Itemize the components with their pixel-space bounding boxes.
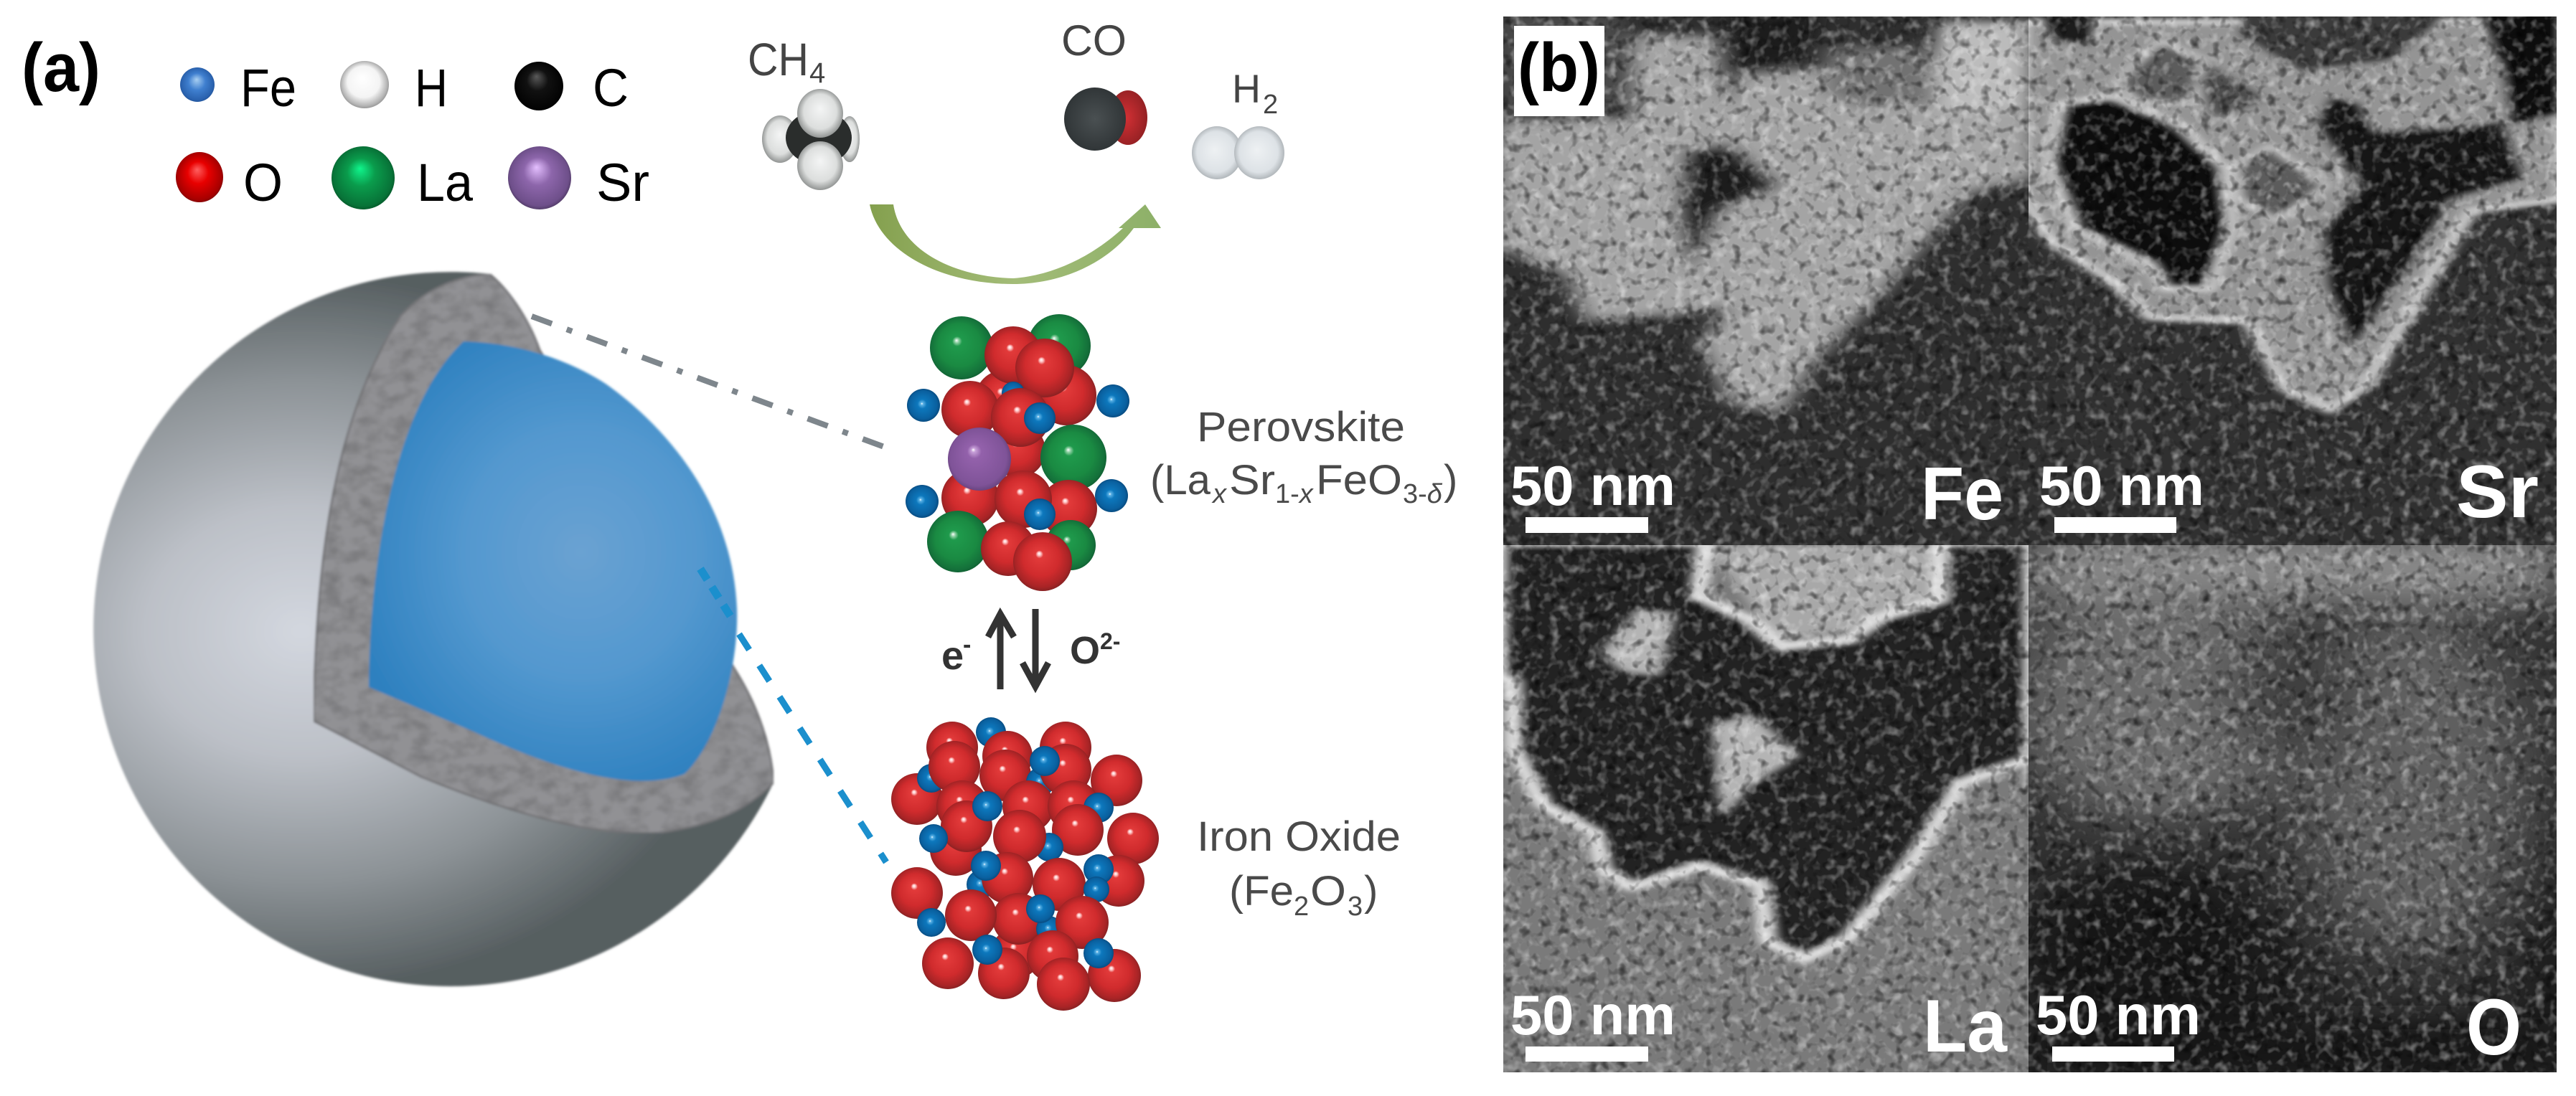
perovskite label: x	[1211, 479, 1228, 509]
legend item C: C	[593, 58, 629, 118]
panel a: core-shell schematic	[22, 29, 898, 986]
iron oxide label: 3	[1348, 892, 1363, 922]
H2 label	[1232, 66, 1278, 120]
La scale bar and label: 50 nm	[1510, 983, 1675, 1047]
Sr scale bar and label	[2039, 450, 2539, 534]
cut perovskite shell section	[314, 274, 774, 833]
iron oxide label: Iron Oxide	[1197, 813, 1401, 860]
perovskite label: 3-δ	[1403, 479, 1443, 509]
legend item La: La	[417, 153, 474, 212]
legend item H	[340, 58, 448, 118]
blue iron oxide core	[369, 341, 737, 781]
iron oxide label: 2	[1294, 892, 1309, 922]
carbon monoxide molecule	[1064, 88, 1147, 151]
legend item O	[176, 152, 283, 212]
e- label: -	[963, 631, 971, 658]
panel label (a): (a)	[22, 29, 100, 106]
hydrogen molecule	[1192, 126, 1284, 179]
legend item La	[332, 146, 474, 212]
electron and oxide ion exchange arrows	[941, 609, 1120, 689]
perovskite label	[1150, 404, 1457, 509]
CH4 label: 4	[809, 57, 825, 89]
iron oxide cluster	[891, 717, 1159, 1011]
legend item Sr	[508, 146, 649, 212]
down arrow	[1023, 609, 1048, 686]
perovskite label: Perovskite	[1197, 404, 1405, 450]
La scale bar and label	[1510, 983, 2008, 1068]
Sr scale bar and label: Sr	[2456, 450, 2539, 534]
O map	[2029, 545, 2557, 1072]
iron oxide label: (Fe	[1229, 868, 1294, 915]
CH4 label: CH	[748, 34, 809, 85]
perovskite label: Sr	[1229, 457, 1275, 504]
speckle noise: light grains	[1503, 16, 2557, 1072]
panel b: elemental maps	[1497, 14, 2576, 1090]
legend item Fe	[180, 58, 296, 118]
Sr map	[2022, 14, 2562, 545]
Sr scale bar and label: 50 nm	[2039, 454, 2204, 517]
O2- label: O	[1070, 629, 1100, 672]
legend item C	[514, 58, 629, 118]
legend item Fe: Fe	[240, 58, 296, 118]
legend: atom key	[176, 58, 649, 212]
cutaway sphere	[93, 272, 774, 986]
La map	[1497, 542, 2034, 1072]
iron oxide label: )	[1364, 868, 1378, 915]
perovskite label: FeO	[1316, 457, 1402, 504]
O scale bar and label: 50 nm	[2036, 983, 2201, 1047]
legend item Sr: Sr	[596, 153, 649, 212]
green curved reaction arrow	[870, 204, 1161, 284]
Fe scale bar and label: Fe	[1921, 453, 2003, 536]
O scale bar and label: O	[2466, 983, 2521, 1072]
CO label: CO	[1061, 16, 1127, 65]
Fe scale bar and label: 50 nm	[1510, 454, 1675, 517]
reaction: methane to syngas	[748, 16, 1284, 284]
up arrow	[988, 614, 1014, 689]
iron oxide label	[1197, 813, 1401, 922]
panel label (b): (b)	[1518, 29, 1600, 106]
H2 label: 2	[1263, 90, 1278, 120]
speckle noise: dark grains	[1503, 16, 2557, 1072]
Fe map	[1497, 14, 2034, 545]
perovskite unit cell	[906, 314, 1129, 591]
La scale bar and label: La	[1923, 985, 2008, 1068]
O scale bar and label	[2036, 983, 2521, 1072]
legend item H: H	[415, 58, 448, 118]
legend item O: O	[243, 153, 283, 212]
perovskite label: )	[1444, 457, 1457, 504]
blue dashed leader line to iron oxide	[700, 569, 886, 862]
H2 label: H	[1232, 66, 1261, 111]
O2- label: 2-	[1100, 628, 1120, 654]
Fe scale bar and label	[1510, 453, 2003, 536]
perovskite label: 1-x	[1275, 479, 1315, 509]
e- label: e	[941, 633, 964, 678]
methane molecule	[762, 89, 860, 190]
grey dash-dot leader line to perovskite	[532, 316, 898, 452]
iron oxide label: O	[1310, 868, 1346, 915]
outer shell surface	[93, 272, 774, 986]
O2- label	[1070, 628, 1120, 672]
perovskite label: (La	[1150, 457, 1211, 504]
